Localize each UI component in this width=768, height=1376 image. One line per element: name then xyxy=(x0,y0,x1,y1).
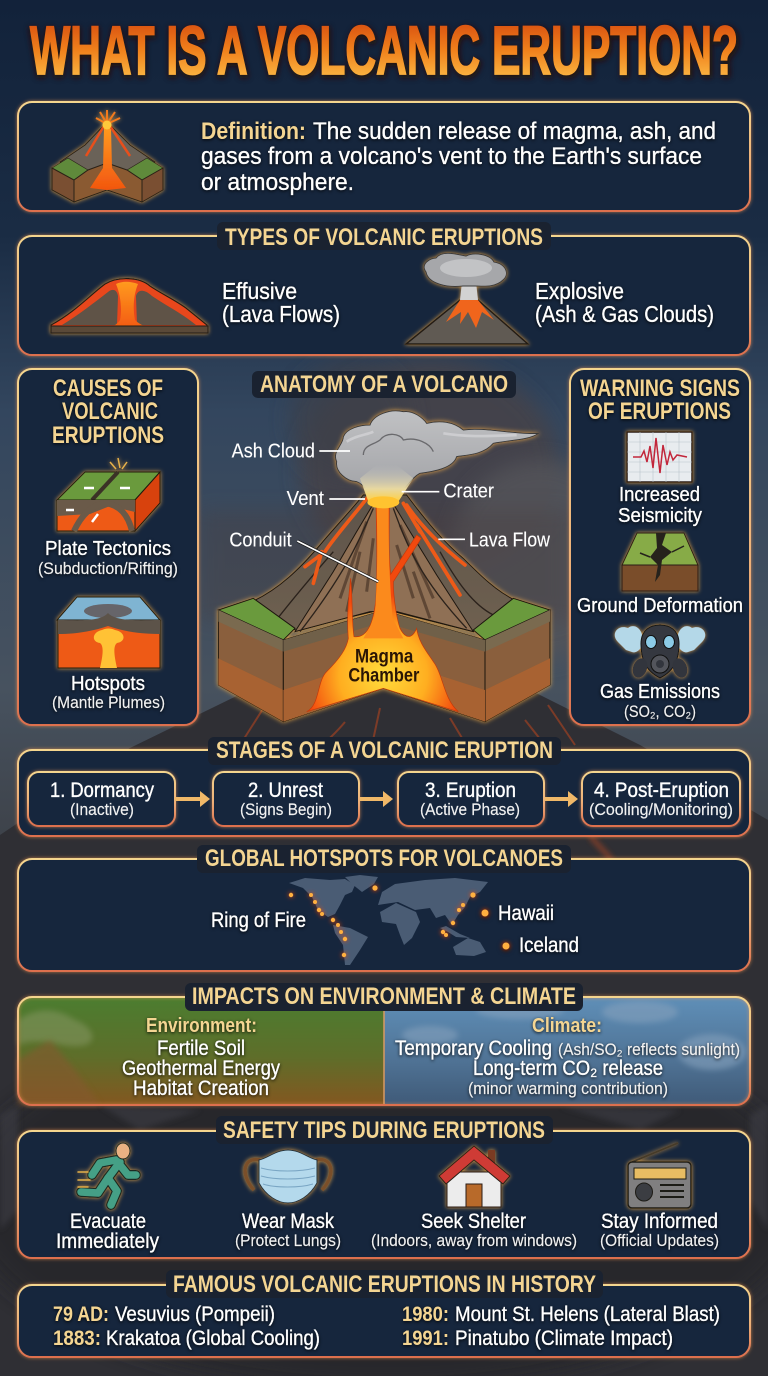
stage 2 xyxy=(213,772,359,826)
callout labels: Vent xyxy=(287,488,324,510)
stage 1: (Inactive) xyxy=(70,801,134,819)
callout labels: Conduit xyxy=(229,530,292,552)
icon: running person xyxy=(78,1143,136,1205)
text: climate: (Ash/SO₂ reflects sunlight) xyxy=(558,1041,740,1059)
ash cloud xyxy=(335,411,538,493)
text: wear mask: (Protect Lungs) xyxy=(235,1232,341,1250)
mountain and block xyxy=(218,495,550,722)
icon: explosive volcano with ash cloud xyxy=(406,253,528,344)
event: pinatubo: Pinatubo (Climate Impact) xyxy=(455,1327,673,1350)
callout labels xyxy=(229,441,550,582)
text: climate xyxy=(395,1015,740,1098)
icon: cracked ground xyxy=(622,533,698,591)
heading: types: TYPES OF VOLCANIC ERUPTIONS xyxy=(225,224,543,251)
text: environment xyxy=(122,1015,280,1100)
stage 3: (Active Phase) xyxy=(420,801,520,819)
panel: stages xyxy=(18,737,750,836)
text: evacuate: Immediately xyxy=(56,1230,159,1253)
text: seek shelter xyxy=(371,1210,577,1250)
panel border xyxy=(18,997,750,1105)
event: mount st helens: Mount St. Helens (Lateral Blast) xyxy=(455,1303,720,1326)
stage 3 xyxy=(398,772,544,826)
text: environment: Habitat Creation xyxy=(133,1077,269,1100)
chamber label: Magma xyxy=(355,646,414,667)
text: hotspots: Hotspots xyxy=(71,673,145,695)
chamber label: Chamber xyxy=(348,666,420,687)
callout labels: Crater xyxy=(443,481,494,503)
panel: causes xyxy=(18,369,198,725)
event: vesuvius: Vesuvius (Pompeii) xyxy=(115,1303,275,1326)
text: plate tectonics: Plate Tectonics xyxy=(45,538,171,560)
text: climate: Long-term CO₂ release xyxy=(473,1057,663,1080)
icon: effusive shield volcano xyxy=(51,279,208,333)
text: effusive: Effusive xyxy=(222,278,297,304)
icon: radio xyxy=(628,1143,691,1208)
text: stay informed: (Official Updates) xyxy=(600,1232,719,1250)
text: seismicity: Increased xyxy=(619,484,700,506)
text: explosive: (Ash & Gas Clouds) xyxy=(535,301,714,327)
text: wear mask xyxy=(235,1210,341,1250)
heading: causes: ERUPTIONS xyxy=(52,422,164,449)
callout labels: Ash Cloud xyxy=(232,441,315,463)
stage 2: 2. Unrest xyxy=(248,779,323,802)
lava: conduit and magma chamber xyxy=(305,465,465,712)
arrow xyxy=(360,791,393,807)
callout labels: Lava Flow xyxy=(469,530,550,552)
definition text xyxy=(201,118,716,196)
text: explosive: Explosive xyxy=(535,278,624,304)
icon: hotspot mantle plume xyxy=(57,597,160,668)
definition text: The sudden release of magma, ash, and xyxy=(313,118,716,145)
climate half xyxy=(384,997,750,1105)
text: stay informed: Stay Informed xyxy=(601,1210,718,1233)
heading: causes: CAUSES OF xyxy=(53,375,163,402)
heading: famous: FAMOUS VOLCANIC ERUPTIONS IN HISTORY xyxy=(173,1271,596,1298)
icon: small volcano cutaway xyxy=(52,110,163,202)
text: ring of fire: Ring of Fire xyxy=(211,909,306,932)
text: plate tectonics xyxy=(38,538,178,578)
icon: seismograph xyxy=(627,432,692,482)
text: wear mask: Wear Mask xyxy=(242,1210,334,1233)
text: climate: Climate: xyxy=(532,1015,602,1037)
panel: warning signs xyxy=(570,369,750,725)
heading: hotspots: GLOBAL HOTSPOTS FOR VOLCANOES xyxy=(205,845,563,872)
icon: gas mask xyxy=(615,625,705,680)
arrow xyxy=(175,791,210,807)
text: explosive xyxy=(535,278,714,327)
text: environment: Environment: xyxy=(146,1015,257,1037)
text: ground deformation: Ground Deformation xyxy=(577,595,743,617)
definition text: or atmosphere. xyxy=(201,169,354,196)
volcano dots xyxy=(289,885,476,957)
panel: impacts xyxy=(18,983,750,1105)
heading: causes xyxy=(52,375,164,449)
text: plate tectonics: (Subduction/Rifting) xyxy=(38,560,178,578)
environment half xyxy=(18,997,384,1105)
text: seek shelter: Seek Shelter xyxy=(421,1210,526,1233)
text: seek shelter: (Indoors, away from windows) xyxy=(371,1232,577,1250)
text: environment: Geothermal Energy xyxy=(122,1057,280,1080)
text: effusive xyxy=(222,278,340,327)
text: seismicity: Seismicity xyxy=(618,505,702,527)
icon: house xyxy=(439,1146,510,1207)
text: gas emissions xyxy=(600,681,720,721)
heading: warning signs: OF ERUPTIONS xyxy=(588,398,731,425)
heading: anatomy: ANATOMY OF A VOLCANO xyxy=(260,371,508,398)
text: effusive: (Lava Flows) xyxy=(222,301,340,327)
text: environment: Fertile Soil xyxy=(157,1037,245,1060)
stage 3: 3. Eruption xyxy=(425,779,516,802)
panel: definition xyxy=(18,102,750,211)
text: evacuate: Evacuate xyxy=(70,1210,146,1233)
text: climate: Temporary Cooling xyxy=(395,1037,552,1060)
event: vesuvius xyxy=(53,1303,275,1326)
text: hotspots: (Mantle Plumes) xyxy=(52,694,165,712)
event: vesuvius: 79 AD: xyxy=(53,1303,109,1326)
panel: anatomy of a volcano xyxy=(218,371,550,722)
event: mount st helens: 1980: xyxy=(402,1303,449,1326)
stage 1 xyxy=(28,772,175,826)
text: hotspots xyxy=(52,673,165,712)
volcano diagram xyxy=(218,411,550,722)
text: gas emissions: (SO₂, CO₂) xyxy=(624,703,696,721)
definition text: gases from a volcano's vent to the Earth's surface xyxy=(201,143,702,170)
icon: plate tectonics block xyxy=(57,458,160,531)
text: seismicity xyxy=(618,484,702,527)
text: evacuate xyxy=(56,1210,159,1253)
stage 4: 4. Post-Eruption xyxy=(594,779,729,802)
text: gas emissions: Gas Emissions xyxy=(600,681,720,703)
world map xyxy=(289,875,488,965)
chamber label xyxy=(348,646,420,687)
text: stay informed xyxy=(600,1210,719,1250)
label: hawaii: Hawaii xyxy=(498,902,554,925)
panel: safety tips xyxy=(18,1116,750,1258)
icon: face mask xyxy=(245,1150,331,1203)
heading: stages: STAGES OF A VOLCANIC ERUPTION xyxy=(216,737,553,764)
text: climate: (minor warming contribution) xyxy=(468,1080,668,1098)
panel: global hotspots xyxy=(18,845,750,971)
stage 4 xyxy=(582,772,740,826)
panel: famous eruptions xyxy=(18,1270,750,1357)
heading: safety: SAFETY TIPS DURING ERUPTIONS xyxy=(223,1117,545,1144)
label: iceland: Iceland xyxy=(519,934,579,957)
heading: impacts: IMPACTS ON ENVIRONMENT & CLIMATE xyxy=(192,983,576,1010)
definition text: Definition: xyxy=(201,118,306,145)
heading: causes: VOLCANIC xyxy=(62,398,158,425)
arrow xyxy=(545,791,578,807)
stage 4: (Cooling/Monitoring) xyxy=(589,801,733,819)
event: krakatoa: 1883: xyxy=(53,1327,101,1350)
event: krakatoa: Krakatoa (Global Cooling) xyxy=(106,1327,320,1350)
event: pinatubo: 1991: xyxy=(402,1327,449,1350)
stage 2: (Signs Begin) xyxy=(240,801,332,819)
stage 1: 1. Dormancy xyxy=(50,779,154,802)
heading: warning signs xyxy=(580,375,740,425)
panel: types of eruptions xyxy=(18,222,750,355)
